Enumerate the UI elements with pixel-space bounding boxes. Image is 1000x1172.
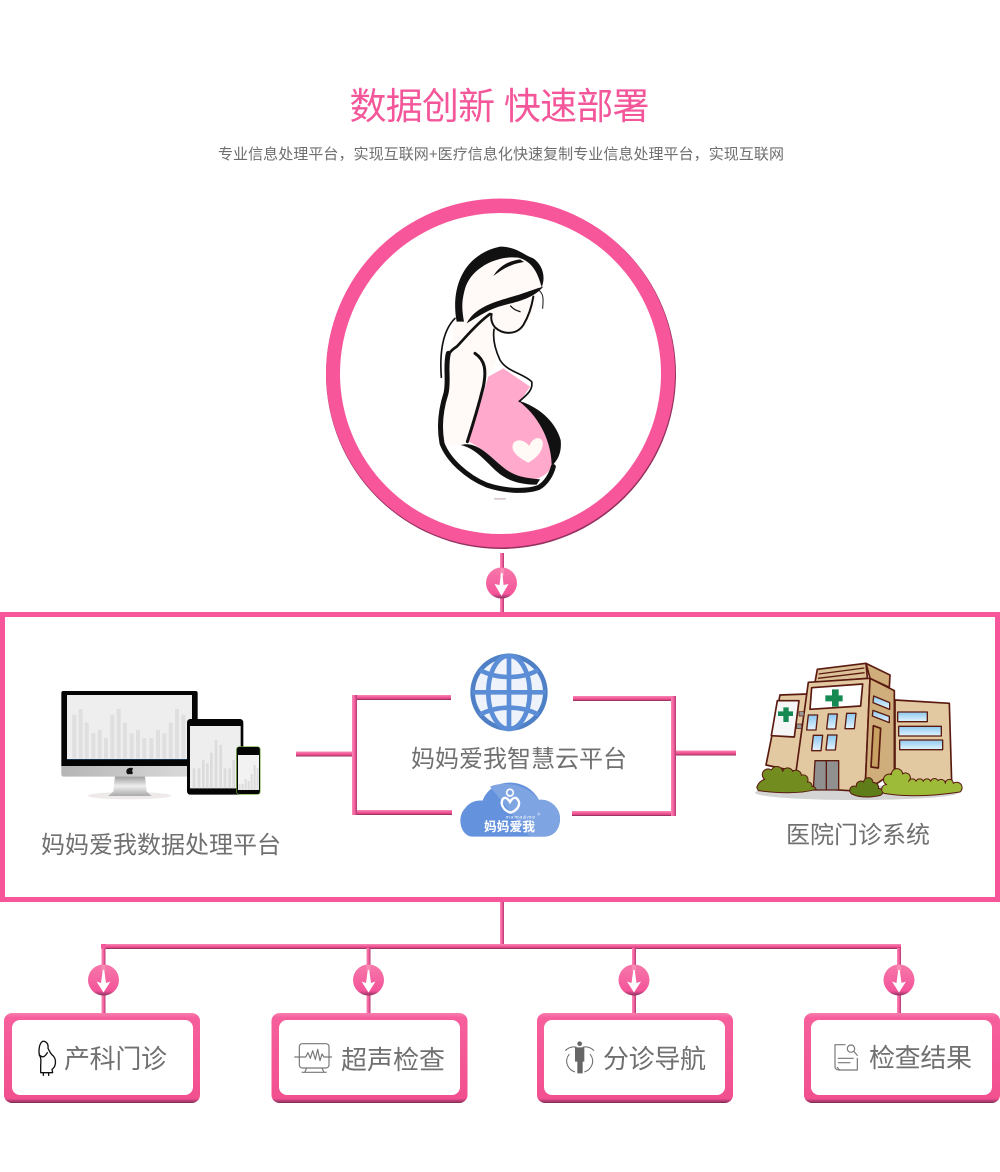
icon: monitor tablet and phone with charts xyxy=(61,691,260,799)
connector: right stub xyxy=(676,750,736,756)
icon: pregnant woman illustration xyxy=(440,247,561,500)
label: ultrasound exam: 超声检查 xyxy=(341,1045,445,1075)
connector tree: panel to four modules xyxy=(101,902,901,1014)
icon: body figure xyxy=(565,1041,594,1073)
icon: pregnant figure xyxy=(39,1041,55,1075)
subtitle text: 专业信息处理平台，实现互联网+医疗信息化快速复制专业信息处理平台，实现互联网 xyxy=(218,145,784,163)
connector: left stub xyxy=(296,752,353,756)
large circle with pregnant woman xyxy=(326,198,676,549)
icon: cloud logo: 妈妈爱我 xyxy=(484,819,535,834)
connector: circle to panel with arrow xyxy=(486,553,517,613)
label: smart cloud platform: 妈妈爱我智慧云平台 xyxy=(411,746,627,773)
icon: hospital building xyxy=(755,663,962,800)
panel: platform systems xyxy=(2,614,998,900)
icon: cloud logo: ® xyxy=(537,811,540,816)
arrow node 4 xyxy=(884,964,914,996)
connector: left bracket xyxy=(352,695,452,815)
arrow node 2 xyxy=(353,964,384,996)
module: triage navigation xyxy=(537,1013,733,1103)
arrow node 3 xyxy=(618,964,650,996)
label: data processing platform: 妈妈爱我数据处理平台 xyxy=(41,832,281,859)
icon: ultrasound monitor xyxy=(294,1044,332,1072)
label: hospital clinic system: 医院门诊系统 xyxy=(786,822,930,849)
icon: globe xyxy=(472,656,546,729)
label: obstetrics clinic: 产科门诊 xyxy=(64,1044,167,1074)
icon: cloud logo xyxy=(460,783,560,837)
label: triage navigation: 分诊导航 xyxy=(603,1044,706,1074)
label: exam results: 检查结果 xyxy=(869,1043,972,1073)
module: ultrasound exam xyxy=(272,1013,468,1103)
connector: right bracket xyxy=(572,696,676,816)
icon: report document with magnifier xyxy=(835,1045,857,1070)
module: obstetrics clinic xyxy=(4,1013,200,1103)
arrow node 1 xyxy=(88,964,119,996)
title: 数据创新 快速部署 xyxy=(350,86,650,127)
icon: cloud logo: mama&me xyxy=(506,814,535,820)
module: exam results xyxy=(804,1013,1000,1103)
